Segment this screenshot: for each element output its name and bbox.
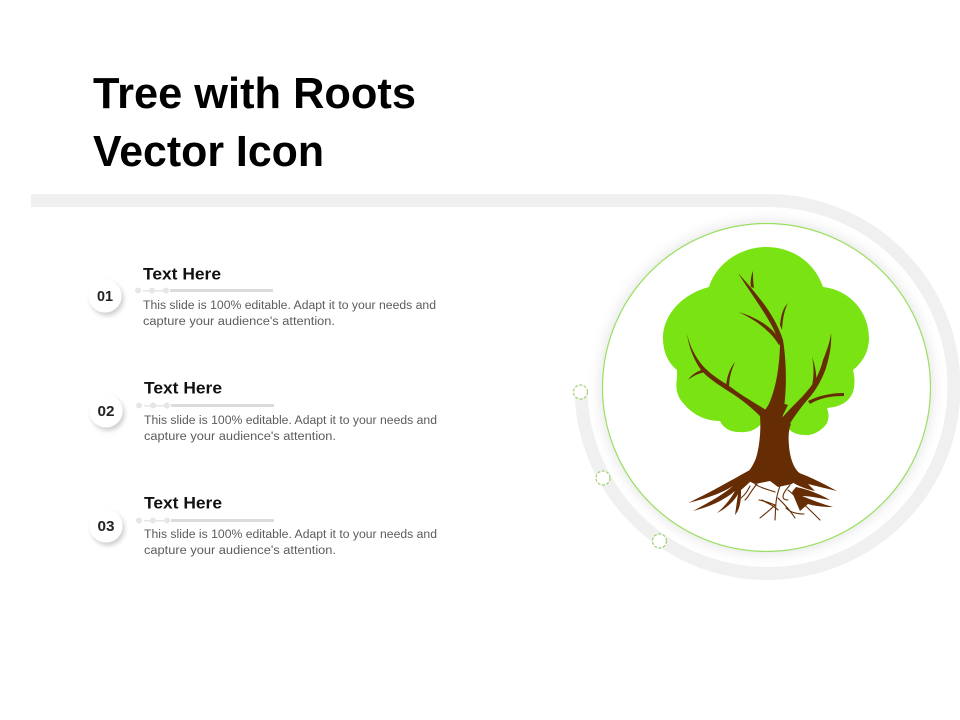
icon: tree with roots	[663, 247, 869, 520]
body text 1	[143, 300, 436, 328]
divider 1	[135, 288, 273, 294]
body text 2: capture your audience's attention.	[144, 431, 336, 443]
body text 3: This slide is 100% editable. Adapt it to your needs and	[144, 529, 437, 541]
body text 3: capture your audience's attention.	[144, 545, 336, 557]
dashed marker dots	[574, 385, 666, 548]
tree branches	[687, 271, 844, 425]
body text 1: This slide is 100% editable. Adapt it to your needs and	[143, 300, 436, 312]
title	[93, 69, 416, 176]
title: Tree with Roots	[93, 69, 416, 118]
number badge 02	[90, 394, 122, 428]
heading 1: Text Here	[143, 264, 221, 284]
heading 2: Text Here	[144, 378, 222, 398]
main circle	[602, 224, 930, 552]
item 1	[88, 264, 436, 328]
number badge 01: 01	[97, 289, 113, 305]
body text 2	[144, 415, 437, 443]
number badge 02: 02	[98, 404, 114, 420]
tree foliage	[663, 247, 869, 435]
tree roots	[688, 470, 837, 515]
body text 2: This slide is 100% editable. Adapt it to your needs and	[144, 415, 437, 427]
divider 2	[136, 402, 274, 408]
grey rail and arc	[31, 200, 954, 573]
title: Vector Icon	[93, 127, 324, 176]
item 2	[90, 378, 437, 443]
divider 3	[136, 518, 274, 524]
number badge 03: 03	[98, 519, 114, 535]
number badge 03	[90, 510, 122, 542]
item 3	[90, 494, 437, 557]
heading 3: Text Here	[144, 494, 222, 512]
fine roots	[741, 484, 820, 520]
body text 3	[144, 529, 437, 557]
body text 1: capture your audience's attention.	[143, 316, 335, 328]
number badge 01	[88, 280, 122, 312]
tree trunk	[742, 400, 801, 487]
